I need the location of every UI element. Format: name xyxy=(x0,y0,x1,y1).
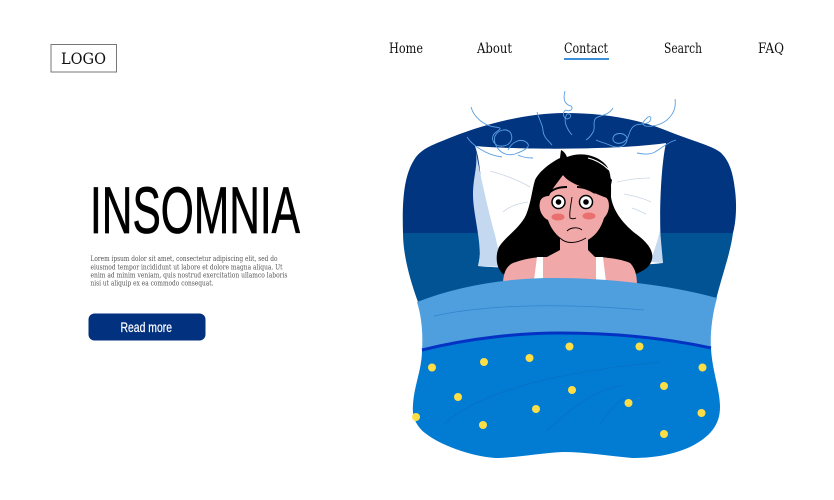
button: read more xyxy=(88,314,206,340)
title: INSOMNIA xyxy=(90,173,300,247)
blanket xyxy=(413,333,720,458)
face xyxy=(540,175,609,243)
tangled thought lines xyxy=(467,91,676,158)
body text xyxy=(90,255,288,288)
body text: Lorem ipsum dolor sit amet, consectetur adipiscing elit, sed do xyxy=(90,255,278,263)
blanket fold xyxy=(417,278,717,350)
blanket edge xyxy=(422,333,711,350)
navigation: Search xyxy=(664,41,702,57)
button: read more: Read more xyxy=(120,319,172,335)
body text: eiusmod tempor incididunt ut labore et dolore magna aliqua. Ut xyxy=(90,264,283,272)
bed background lower xyxy=(403,233,733,302)
brows, nose and mouth xyxy=(549,187,595,193)
blanket creases xyxy=(434,306,644,316)
illustration: woman awake in bed xyxy=(403,91,736,458)
shoulders and chest xyxy=(503,257,637,285)
navigation: Contact xyxy=(564,41,608,57)
blanket yellow dots xyxy=(412,342,706,438)
pillow xyxy=(473,143,666,268)
eyes xyxy=(552,196,592,208)
logo xyxy=(51,44,116,72)
body text: enim ad minim veniam, quis nostrud exercitation ullamco laboris xyxy=(90,272,288,280)
logo: LOGO xyxy=(61,49,106,68)
bed background upper xyxy=(403,113,736,233)
navigation: FAQ xyxy=(758,41,784,57)
hair highlight xyxy=(588,158,609,170)
navigation: Home xyxy=(389,41,423,57)
tank top straps xyxy=(534,257,606,282)
hair front strands xyxy=(548,165,612,200)
navigation xyxy=(389,41,784,60)
navigation: About xyxy=(476,41,512,57)
neck xyxy=(545,232,596,258)
hair back xyxy=(497,150,652,274)
blush xyxy=(552,214,564,220)
body text: nisi ut aliquip ex ea commodo consequat. xyxy=(90,280,214,288)
